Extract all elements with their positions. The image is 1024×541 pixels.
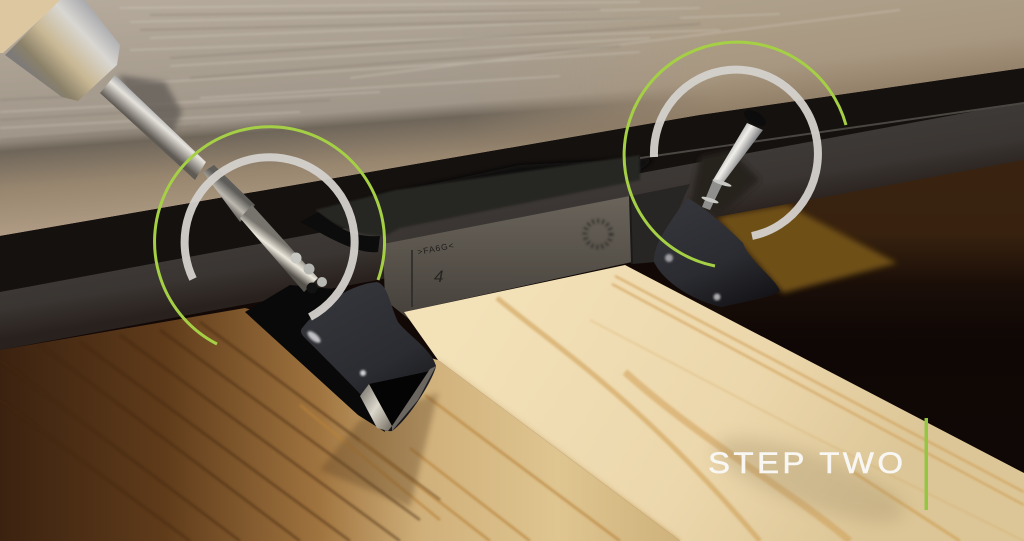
driver handle	[0, 0, 62, 53]
joist side, lower left timber	[0, 300, 700, 541]
driver chuck	[5, 0, 120, 101]
left hanger clip	[245, 282, 436, 432]
right hanger clip	[654, 198, 780, 307]
screw right	[701, 107, 768, 210]
bracket plate with marking	[383, 184, 690, 320]
driver shaft	[100, 75, 206, 180]
vertical accent line	[924, 418, 928, 510]
right target rings	[624, 42, 846, 266]
dark gap under board	[0, 68, 1024, 294]
deck board	[0, 0, 1024, 240]
bracket plate with marking: >FA6G<	[416, 240, 455, 257]
bracket plate with marking: 4	[434, 267, 443, 286]
step label: STEP TWO	[708, 447, 906, 480]
left target rings	[155, 127, 385, 344]
joist top face	[400, 260, 1024, 541]
driver shadow on board	[118, 75, 182, 135]
metal rail	[0, 102, 1024, 350]
screw driver with chuck	[0, 0, 327, 294]
